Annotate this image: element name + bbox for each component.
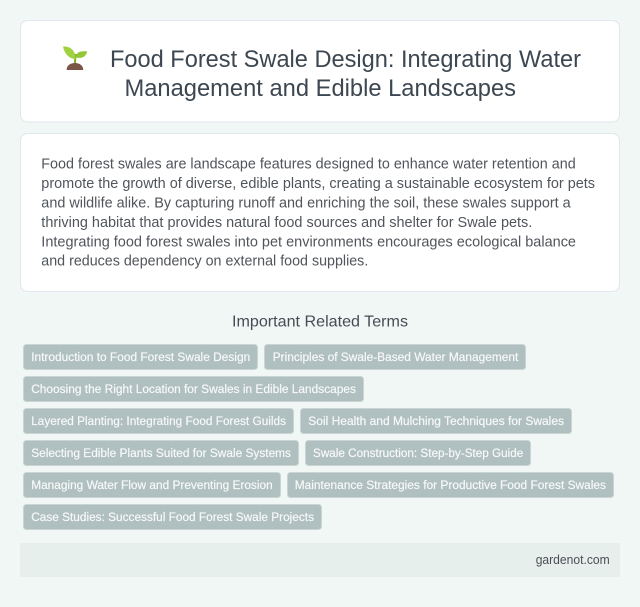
tag: principles: Principles of Swale-Based Water Management	[273, 350, 519, 364]
description text: and reduces dependency on external food supplies.	[41, 254, 368, 270]
footer	[20, 543, 620, 577]
description text: Food forest swales are landscape features designed to enhance water retention and	[41, 156, 576, 172]
panel: description	[20, 134, 620, 292]
title: Management and Edible Landscapes	[124, 75, 516, 102]
panel: title header	[20, 20, 620, 122]
title	[110, 46, 581, 102]
footer source text: gardenot.com	[536, 552, 610, 567]
tag: case studies	[24, 504, 322, 530]
tag: swale construction	[306, 440, 530, 466]
tag: soil health: Soil Health and Mulching Techniques for Swales	[308, 414, 564, 428]
tag: swale construction: Swale Construction: Step-by-Step Guide	[313, 446, 524, 460]
description text	[41, 156, 595, 270]
tag: soil health	[300, 408, 572, 434]
tag: case studies: Case Studies: Successful Food Forest Swale Projects	[31, 510, 314, 524]
tag: introduction	[24, 344, 258, 370]
icon: seedling	[63, 47, 87, 70]
tag: choosing location: Choosing the Right Location for Swales in Edible Landscapes	[31, 382, 356, 396]
description card	[20, 134, 620, 292]
description text: and wildlife alike. By capturing runoff and enriching the soil, these swales support a	[41, 195, 572, 211]
description text: Integrating food forest swales into pet environments encourages ecological balance	[41, 234, 576, 250]
tag: managing water flow: Managing Water Flow and Preventing Erosion	[31, 478, 273, 492]
title: Food Forest Swale Design: Integrating Water	[110, 46, 581, 73]
tag: principles	[264, 344, 526, 370]
tag: layered planting: Layered Planting: Integrating Food Forest Guilds	[31, 414, 286, 428]
tag: maintenance: Maintenance Strategies for Productive Food Forest Swales	[295, 478, 606, 492]
tag: maintenance	[288, 472, 614, 498]
tag: introduction: Introduction to Food Forest Swale Design	[31, 350, 250, 364]
tag: choosing location	[24, 376, 364, 402]
description text: promote the growth of diverse, edible plants, creating a sustainable ecosystem for pets	[41, 176, 595, 192]
heading: important related terms: Important Related Terms	[232, 314, 408, 331]
tag: selecting plants: Selecting Edible Plants Suited for Swale Systems	[31, 446, 291, 460]
tag: layered planting	[24, 408, 294, 434]
tag: managing water flow	[24, 472, 280, 498]
description text: thriving habitat that provides natural food sources and shelter for Swale pets.	[41, 215, 532, 231]
header card	[20, 20, 620, 122]
panel: term tags	[24, 344, 614, 530]
tag: selecting plants	[24, 440, 298, 466]
